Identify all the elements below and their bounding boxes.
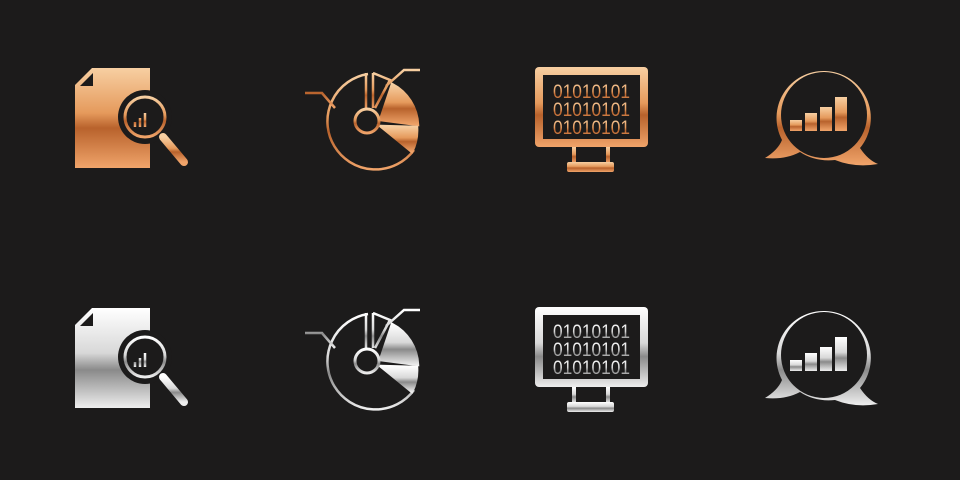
icon: document with magnifier (gold)	[75, 68, 184, 168]
icon: monitor with binary (gold): 01010101	[553, 118, 630, 139]
icon: monitor with binary (gold): 01010101	[553, 82, 630, 103]
icon: pie chart (gold)	[305, 70, 420, 169]
row: gold icons	[75, 67, 878, 172]
icon: monitor with binary (silver): 01010101	[553, 358, 630, 379]
icon: monitor with binary (silver): 01010101	[553, 340, 630, 361]
icon: document with magnifier (silver)	[75, 308, 184, 408]
row: silver icons	[75, 307, 878, 412]
icon: monitor with binary (gold)	[535, 67, 648, 172]
icon: speech bubble with signal bars (silver)	[765, 311, 878, 405]
icon: monitor with binary (silver)	[535, 307, 648, 412]
icon: speech bubble with signal bars (gold)	[765, 71, 878, 165]
icon: pie chart (silver)	[305, 310, 420, 409]
icon: monitor with binary (silver): 01010101	[553, 322, 630, 343]
icon: monitor with binary (gold): 01010101	[553, 100, 630, 121]
